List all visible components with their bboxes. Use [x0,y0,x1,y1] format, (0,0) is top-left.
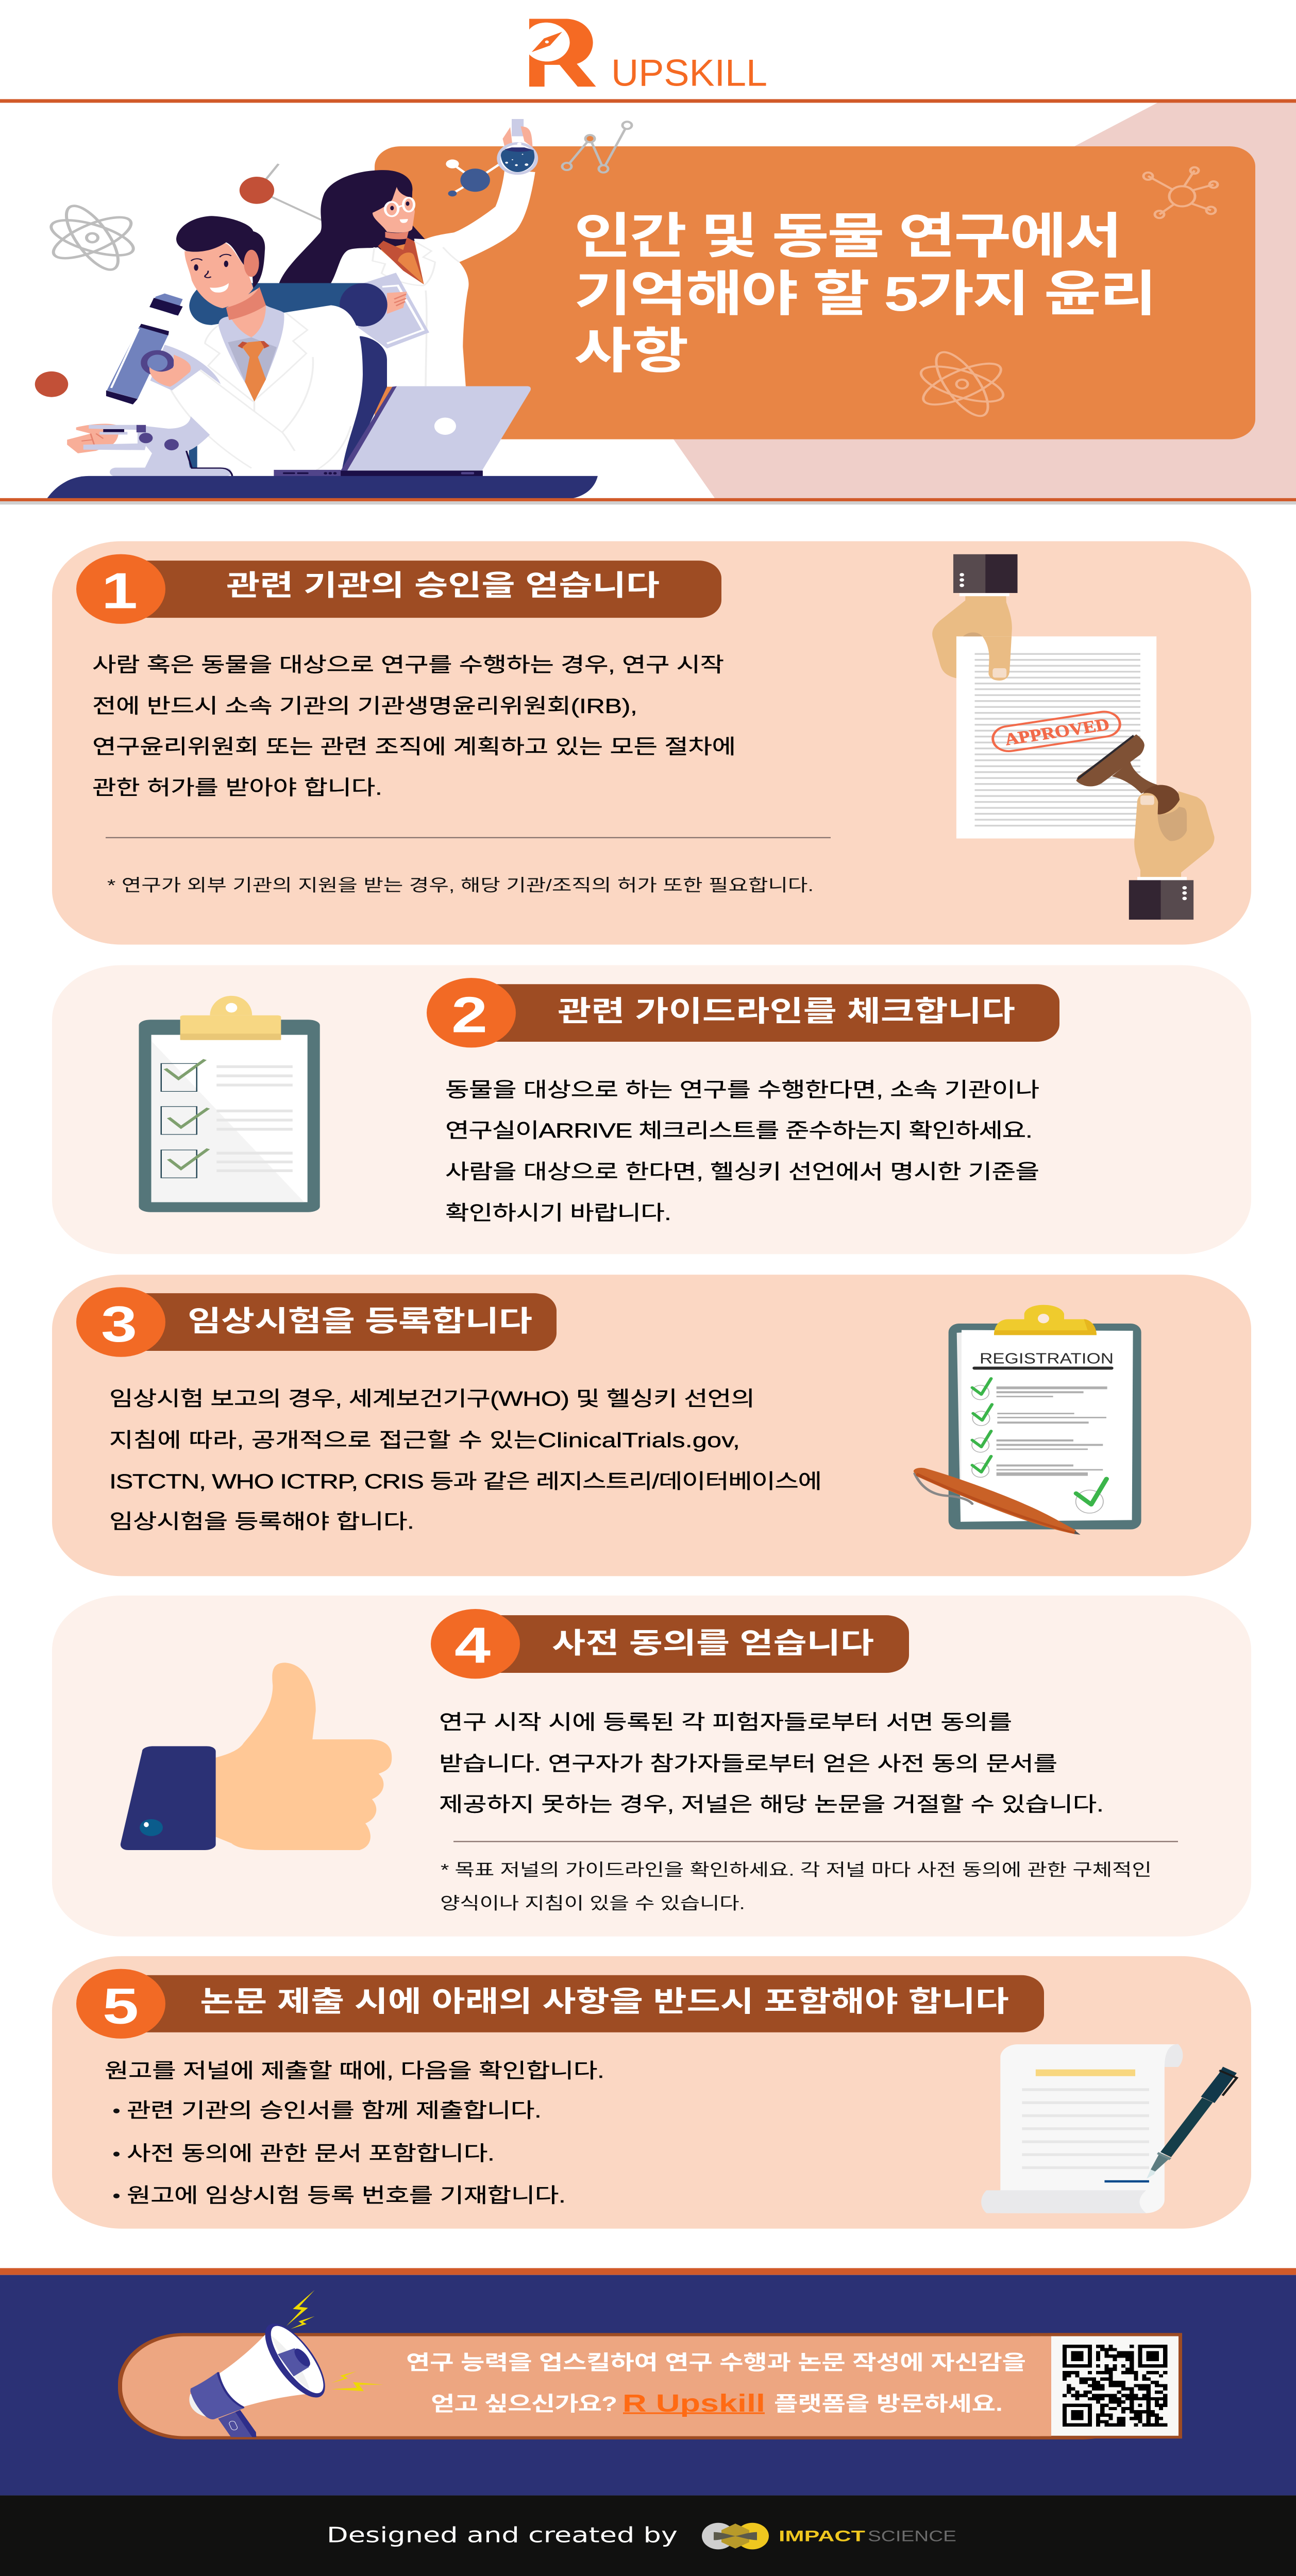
body text: 연구실이ARRIVE 체크리스트를 준수하는지 확인하세요. [445,1120,1033,1142]
body text: 전에 반드시 소속 기관의 기관생명윤리위원회(IRB), [92,694,637,717]
logo: R Upskill [529,19,767,94]
body text: ISTCTN, WHO ICTRP, CRIS 등과 같은 레지스트리/데이터베이스에 [109,1470,822,1493]
callout text: 얻고 싶으신가요? [431,2393,617,2415]
background pink shape [674,103,1296,498]
heading bar [121,1975,1044,2032]
body text: 임상시험을 등록해야 합니다. [109,1510,414,1533]
body text: 제공하지 못하는 경우, 저널은 해당 논문을 거절할 수 있습니다. [439,1793,1104,1816]
panel: step 3 [52,1275,1251,1576]
number badge: 2 [451,986,487,1043]
icon: checklist clipboard [139,996,320,1212]
woman scientist [279,170,535,387]
bullet list: 원고에 임상시험 등록 번호를 기재합니다. [127,2184,566,2207]
body text: 동물을 대상으로 하는 연구를 수행한다면, 소속 기관이나 [445,1078,1039,1101]
icon: R compass mark [529,19,596,87]
callout text: 연구 능력을 업스킬하여 연구 수행과 논문 작성에 자신감을 [406,2351,1026,2374]
icon: thumbs up [121,1663,392,1850]
illustration: scientists [35,119,598,498]
desk [47,476,598,498]
panel: step 4 [52,1596,1251,1937]
body text [109,1387,822,1533]
panel background [52,1596,1251,1937]
QR code [1051,2336,1179,2436]
panel: step 2 [52,965,1251,1254]
body text [105,2059,604,2207]
heading bar [121,561,721,618]
blue molecule [446,160,504,196]
body text: 사람 혹은 동물을 대상으로 연구를 수행하는 경우, 연구 시작 [92,653,724,676]
panel background [52,1275,1251,1576]
tablet clipboard [358,273,429,348]
flask [497,119,538,175]
number badge [427,978,516,1047]
icon: molecule on panel [1143,167,1218,218]
label: registration: REGISTRATION [980,1350,1114,1367]
body text: 지침에 따라, 공개적으로 접근할 수 있는ClinicalTrials.gov, [109,1429,740,1452]
number badge [76,554,165,624]
callout text: R Upskill [622,2389,765,2417]
logo: Impact Science [702,2523,956,2549]
laptop [274,386,531,477]
title: 사항 [574,325,689,379]
body text: 사람을 대상으로 한다면, 헬싱키 선언에서 명시한 기준을 [445,1160,1039,1183]
chair [189,283,388,476]
title [574,210,1157,379]
heading bar [121,1293,557,1351]
number badge: 4 [455,1617,491,1673]
callout text: 플랫폼을 방문하세요. [774,2393,1003,2415]
number badge [76,1287,165,1357]
footnote [440,1860,1152,1912]
section: call to action footer [0,2275,1296,2496]
credit text: Designed and created by [327,2523,678,2548]
title: 인간 및 동물 연구에서 [574,210,1122,264]
bullet list [113,2099,566,2207]
navy background [0,2275,1296,2496]
heading: 논문 제출 시에 아래의 사항을 반드시 포함해야 합니다 [200,1986,1009,2018]
number badge [431,1609,520,1679]
callout text [406,2351,1026,2417]
body text: 연구 시작 시에 등록된 각 피험자들로부터 서면 동의를 [439,1711,1012,1734]
icon: registration clipboard [914,1305,1141,1535]
footnote: 양식이나 지침이 있을 수 있습니다. [440,1894,745,1912]
icon: megaphone [189,2290,383,2437]
icon: grey atom [45,200,139,275]
icon: scroll and pen [981,2044,1237,2213]
number badge: 3 [101,1296,137,1352]
body text: 받습니다. 연구자가 참가자들로부터 얻은 사전 동의 문서를 [439,1752,1057,1775]
number badge: 1 [102,563,138,619]
heading: 임상시험을 등록합니다 [188,1305,532,1337]
orange title panel [375,146,1255,439]
credits bar [0,2496,1296,2576]
panel: step 1 [52,541,1251,945]
body text: 연구윤리위원회 또는 관련 조직에 계획하고 있는 모든 절차에 [92,735,736,758]
body text [439,1711,1104,1816]
callout pill [118,2333,1182,2439]
body text [445,1078,1039,1225]
man scientist [171,216,363,476]
logo: Impact Science: IMPACT [779,2528,865,2545]
footnote: * 연구가 외부 기관의 지원을 받는 경우, 해당 기관/조직의 허가 또한 필요합니다. [107,876,814,894]
red atoms [266,164,322,220]
panel background [52,541,1251,945]
logo wordmark: UPSKILL [611,52,767,94]
bullet list: 사전 동의에 관한 문서 포함합니다. [127,2142,495,2165]
heading bar [476,1615,909,1673]
heading: 관련 기관의 승인을 얻습니다 [226,569,660,602]
heading: 사전 동의를 얻습니다 [552,1627,874,1659]
icon: atom on panel [915,347,1009,421]
bullet list: 관련 기관의 승인서를 함께 제출합니다. [127,2099,542,2122]
body text: 확인하시기 바랍니다. [445,1201,671,1225]
panel background [52,965,1251,1254]
heading bar [471,984,1059,1042]
heading: 관련 가이드라인를 체크합니다 [558,995,1015,1027]
hero banner [35,103,1296,498]
icon: grey molecule [562,122,632,173]
number badge [76,1969,165,2039]
body text [92,653,736,799]
logo: Impact Science: SCIENCE [868,2528,956,2545]
illustration: approved document and stamp [932,554,1215,920]
microscope [67,294,232,477]
panel: step 5 [52,1956,1251,2229]
approved stamp mark: APPROVED [1003,715,1112,749]
number badge: 5 [103,1978,139,2034]
panel background [52,1956,1251,2229]
footnote: * 목표 저널의 가이드라인을 확인하세요. 각 저널 마다 사전 동의에 관한 구체적인 [441,1860,1152,1879]
body text: 원고를 저널에 제출할 때에, 다음을 확인합니다. [105,2059,604,2082]
title: 기억해야 할 5가지 윤리 [574,267,1157,321]
body text: 임상시험 보고의 경우, 세계보건기구(WHO) 및 헬싱키 선언의 [109,1387,755,1410]
body text: 관한 허가를 받아야 합니다. [92,776,382,799]
